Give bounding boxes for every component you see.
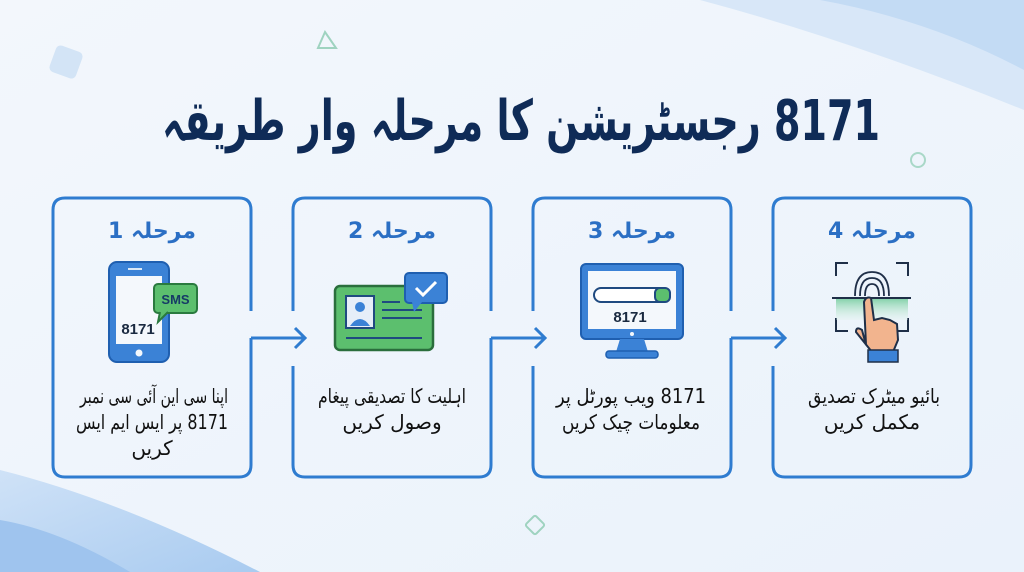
text: step 4: مکمل کریں [824,410,920,434]
heading: step 4: مرحلہ 4 [828,219,916,244]
text: step 2: وصول کریں [342,410,442,434]
panel: step 2 [293,198,491,477]
panel: step 4 [773,198,971,477]
panel: step 1 [53,198,251,477]
text: step 2 [318,384,466,434]
text: step 3: معلومات چیک کریں [562,410,700,434]
text: step 1: اپنا سی این آئی سی نمبر [79,383,228,409]
text: step 4: بائیو میٹرک تصدیق [808,384,940,408]
text: step 1 [76,383,228,460]
text: step 3 [555,384,706,434]
icon: monitor with search [581,264,683,358]
heading: step 2: مرحلہ 2 [348,219,436,244]
icon: monitor with search: 8171 [613,309,647,326]
text: step 2: اہلیت کا تصدیقی پیغام [318,384,466,409]
icon: phone with SMS: SMS [161,292,190,307]
arrow: 2 to 3 [491,328,545,348]
heading: step 1: مرحلہ 1 [108,219,196,244]
text: step 1: کریں [131,436,173,460]
panel: step 3 [533,198,731,477]
icon: fingerprint scan [832,263,911,362]
icon: ID card with check [335,273,447,350]
arrow: 3 to 4 [731,328,785,348]
text: step 1: 8171 پر ایس ایم ایس [76,410,228,435]
text: step 3: 8171 ویب پورٹل پر [555,384,706,409]
icon: phone with SMS: 8171 [121,321,155,338]
arrow: 1 to 2 [251,328,305,348]
heading: step 3: مرحلہ 3 [588,219,676,244]
text: step 4 [808,384,940,434]
icon: phone with SMS [109,262,197,362]
